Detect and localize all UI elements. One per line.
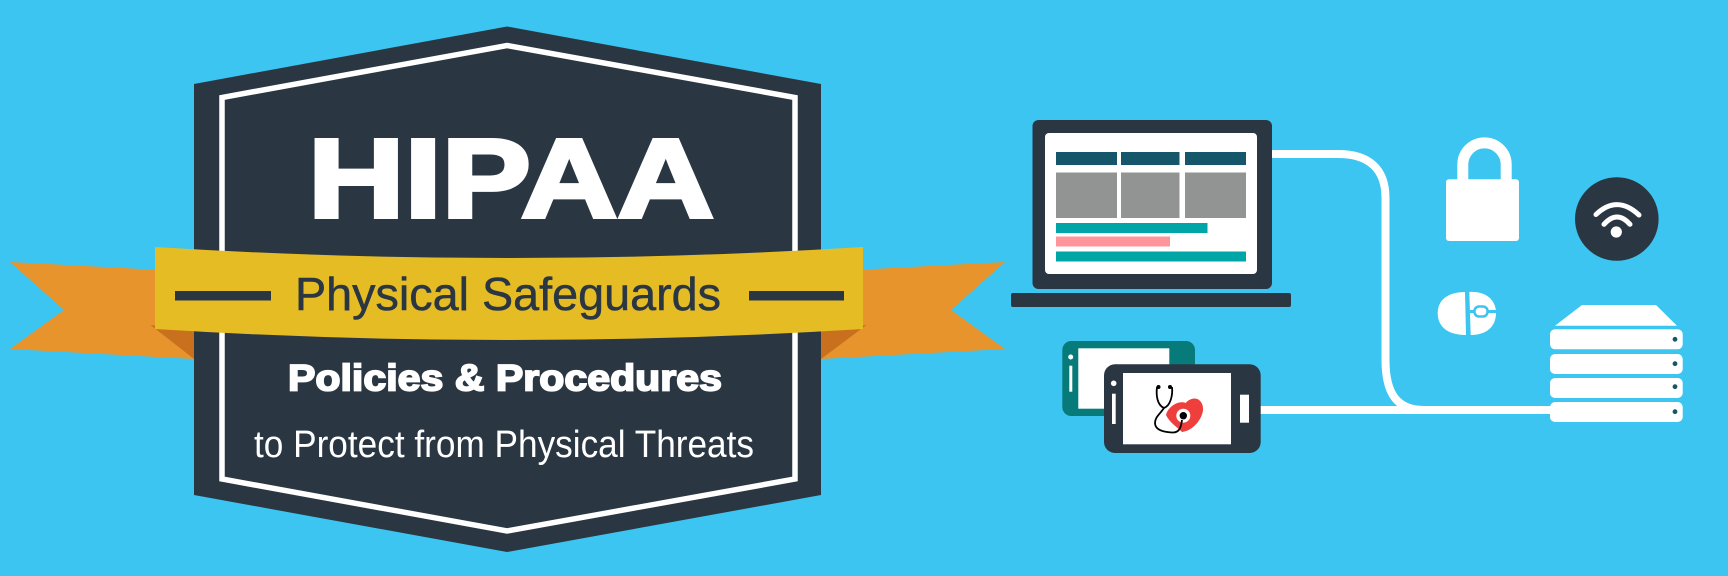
wifi circle xyxy=(1575,177,1659,261)
stethoscope chest piece ring xyxy=(1176,409,1190,423)
front phone body xyxy=(1104,364,1261,453)
padlock body xyxy=(1446,179,1519,241)
wifi waves xyxy=(1596,205,1639,224)
shield body xyxy=(194,26,821,552)
server status lights xyxy=(1673,337,1677,414)
icon: computer mouse xyxy=(1438,292,1497,335)
server unit 2 xyxy=(1550,354,1683,374)
back phone camera xyxy=(1068,354,1073,360)
icon: padlock xyxy=(1446,143,1519,241)
laptop screen frame xyxy=(1032,120,1272,289)
page header cells xyxy=(1056,152,1246,165)
tagline: to Protect from Physical Threats xyxy=(254,424,754,466)
stethoscope tubing xyxy=(1155,387,1182,433)
mouse right half xyxy=(1469,292,1496,335)
server unit 1 xyxy=(1550,329,1683,349)
icon: back phone xyxy=(1062,341,1195,416)
ribbon fold: left xyxy=(150,325,194,359)
ribbon tail: right xyxy=(821,262,1005,359)
subheading: Policies & Procedures: Policies & Procedures xyxy=(288,358,722,398)
mouse left half xyxy=(1438,292,1466,335)
ribbon dash: right xyxy=(749,291,844,300)
badge: HIPAA shield with ribbon xyxy=(10,26,1005,552)
icon: wifi badge xyxy=(1575,177,1659,261)
back phone body xyxy=(1062,341,1195,416)
icon: laptop xyxy=(1011,120,1291,307)
server top cover xyxy=(1555,305,1677,326)
server unit 3 xyxy=(1550,378,1683,398)
heart xyxy=(1166,399,1203,432)
pink bar xyxy=(1056,236,1170,246)
mouse button split xyxy=(1470,310,1497,313)
teal bar: lower xyxy=(1056,252,1246,262)
mouse scroll wheel xyxy=(1474,306,1488,316)
ribbon band xyxy=(155,247,863,340)
page image cells xyxy=(1056,172,1246,218)
stethoscope chest piece xyxy=(1180,412,1187,419)
back phone screen xyxy=(1078,348,1169,409)
front phone screen xyxy=(1123,373,1231,444)
network cables xyxy=(1260,154,1552,410)
title: HIPAA: HIPAA xyxy=(308,116,714,241)
ribbon tail: left xyxy=(10,262,194,359)
front phone speaker xyxy=(1112,394,1116,424)
laptop base xyxy=(1011,293,1291,307)
back phone speaker xyxy=(1069,366,1072,392)
server unit 4 xyxy=(1550,402,1683,422)
wifi dot xyxy=(1611,226,1622,238)
front phone home button xyxy=(1240,395,1249,423)
laptop display xyxy=(1045,133,1257,274)
icon: heart with stethoscope xyxy=(1155,385,1203,433)
stethoscope ear tips xyxy=(1156,385,1172,389)
teal bar: upper xyxy=(1056,223,1208,233)
icon: server stack xyxy=(1550,305,1683,422)
cable: laptop to server xyxy=(1272,154,1552,410)
ribbon dash: left xyxy=(175,291,271,300)
cable: phone to server xyxy=(1260,406,1552,414)
shield inner outline xyxy=(222,46,795,531)
icon: front phone xyxy=(1104,364,1261,453)
ribbon heading: Physical Safeguards: Physical Safeguards xyxy=(295,268,721,320)
front phone camera xyxy=(1111,380,1116,386)
padlock shackle xyxy=(1463,143,1506,182)
ribbon fold: right xyxy=(821,325,866,359)
